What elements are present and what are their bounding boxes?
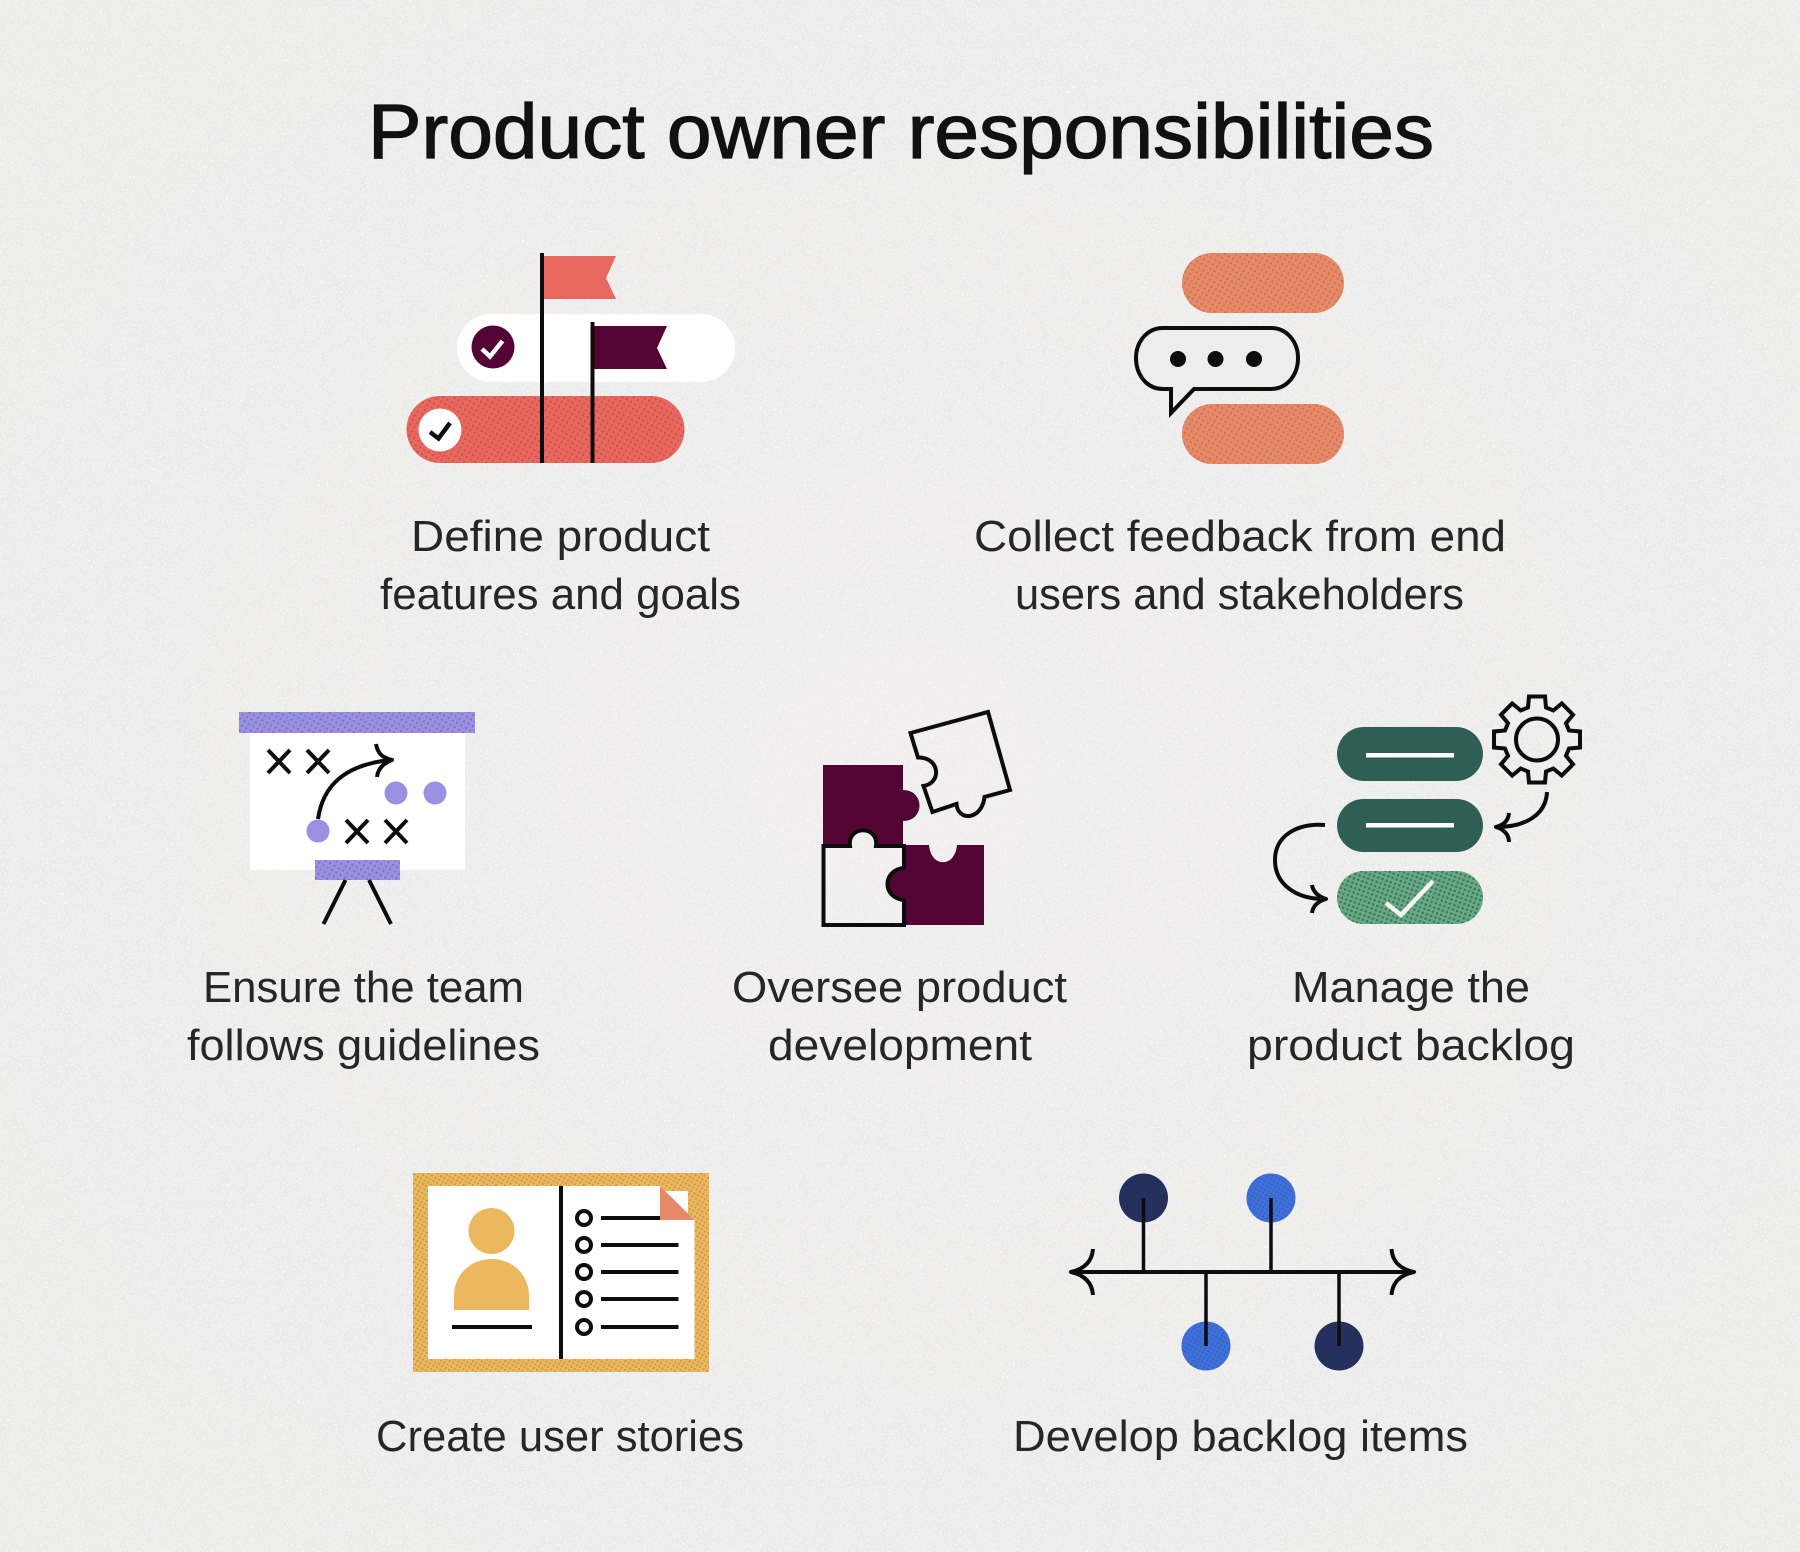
label: collect feedback: users and stakeholders: [1015, 570, 1464, 619]
x marks: [268, 750, 407, 843]
label: manage the backlog: product backlog: [1247, 1021, 1575, 1070]
icon: flags and goals: [406, 253, 735, 463]
speech bubble: [1136, 328, 1298, 413]
board bottom bar: [315, 860, 400, 880]
orange pill bottom: [1182, 404, 1344, 464]
label: manage the backlog: [1247, 963, 1575, 1070]
check badge: white: [418, 408, 462, 452]
label: define product features: features and goals: [380, 570, 741, 619]
fold: white flap: [665, 1191, 688, 1214]
checklist: [577, 1211, 678, 1334]
title: Product owner responsibilities: [368, 89, 1434, 175]
avatar body: [454, 1259, 529, 1310]
label: ensure the team: follows guidelines: [187, 1021, 540, 1070]
arrowhead left: [1071, 1249, 1093, 1295]
arrowhead right: [1392, 1249, 1414, 1295]
icon: timeline: [1071, 1174, 1414, 1370]
label: oversee product: Oversee product: [732, 963, 1067, 1012]
name line: [452, 1325, 532, 1329]
label: ensure the team: [187, 963, 540, 1070]
label: collect feedback: [974, 512, 1506, 619]
green pill 1: [1337, 727, 1483, 781]
node 1: [1119, 1174, 1168, 1222]
icon: presentation board: [239, 712, 475, 924]
green pill 2: [1337, 799, 1483, 852]
white pill: [457, 314, 735, 382]
label: develop backlog items: Develop backlog items: [1013, 1412, 1468, 1461]
purple flag: [594, 326, 667, 369]
flag poles: [542, 253, 592, 463]
label: collect feedback: Collect feedback from end: [974, 512, 1506, 561]
red pill: [406, 396, 684, 463]
orange pill top: [1182, 253, 1344, 313]
play arrow: [318, 744, 392, 819]
dots: [306, 782, 446, 842]
light green pill with check: [1337, 871, 1483, 924]
outline piece bottom left: [824, 830, 904, 925]
arrow pill to pill: [1275, 825, 1326, 913]
spine: [559, 1186, 563, 1359]
easel legs: [324, 880, 391, 924]
outline piece top right: [910, 712, 1010, 816]
label: ensure the team: Ensure the team: [203, 963, 524, 1012]
icon: user story card: [413, 1173, 709, 1372]
board top bar: [239, 712, 475, 733]
board: [250, 733, 465, 870]
bubble dots: [1170, 351, 1262, 367]
label: oversee product: development: [768, 1021, 1032, 1070]
icon: puzzle: [823, 712, 1010, 925]
yellow board: [413, 1173, 709, 1372]
node 2: [1246, 1174, 1296, 1222]
label: define product features: [380, 512, 741, 619]
paper: [428, 1186, 694, 1359]
label: define product features: Define product: [411, 512, 710, 561]
arrow gear to pill: [1496, 792, 1547, 842]
icon: feedback bubble: [1136, 253, 1344, 464]
node 3: [1182, 1322, 1230, 1370]
stems: [1144, 1198, 1339, 1346]
fold: orange: [660, 1186, 694, 1220]
label: oversee product: [732, 963, 1067, 1070]
red flag: [544, 256, 616, 299]
label: manage the backlog: Manage the: [1292, 963, 1530, 1012]
node 4: [1314, 1322, 1364, 1370]
purple piece bottom right: [888, 845, 984, 925]
axis: [1073, 1270, 1412, 1274]
check badge: purple: [472, 326, 514, 368]
icon: backlog list with gear: [1275, 696, 1580, 924]
label: create user stories: Create user stories: [376, 1412, 744, 1461]
gear: [1494, 696, 1580, 782]
purple piece top left: [823, 765, 920, 846]
avatar head: [468, 1208, 514, 1254]
